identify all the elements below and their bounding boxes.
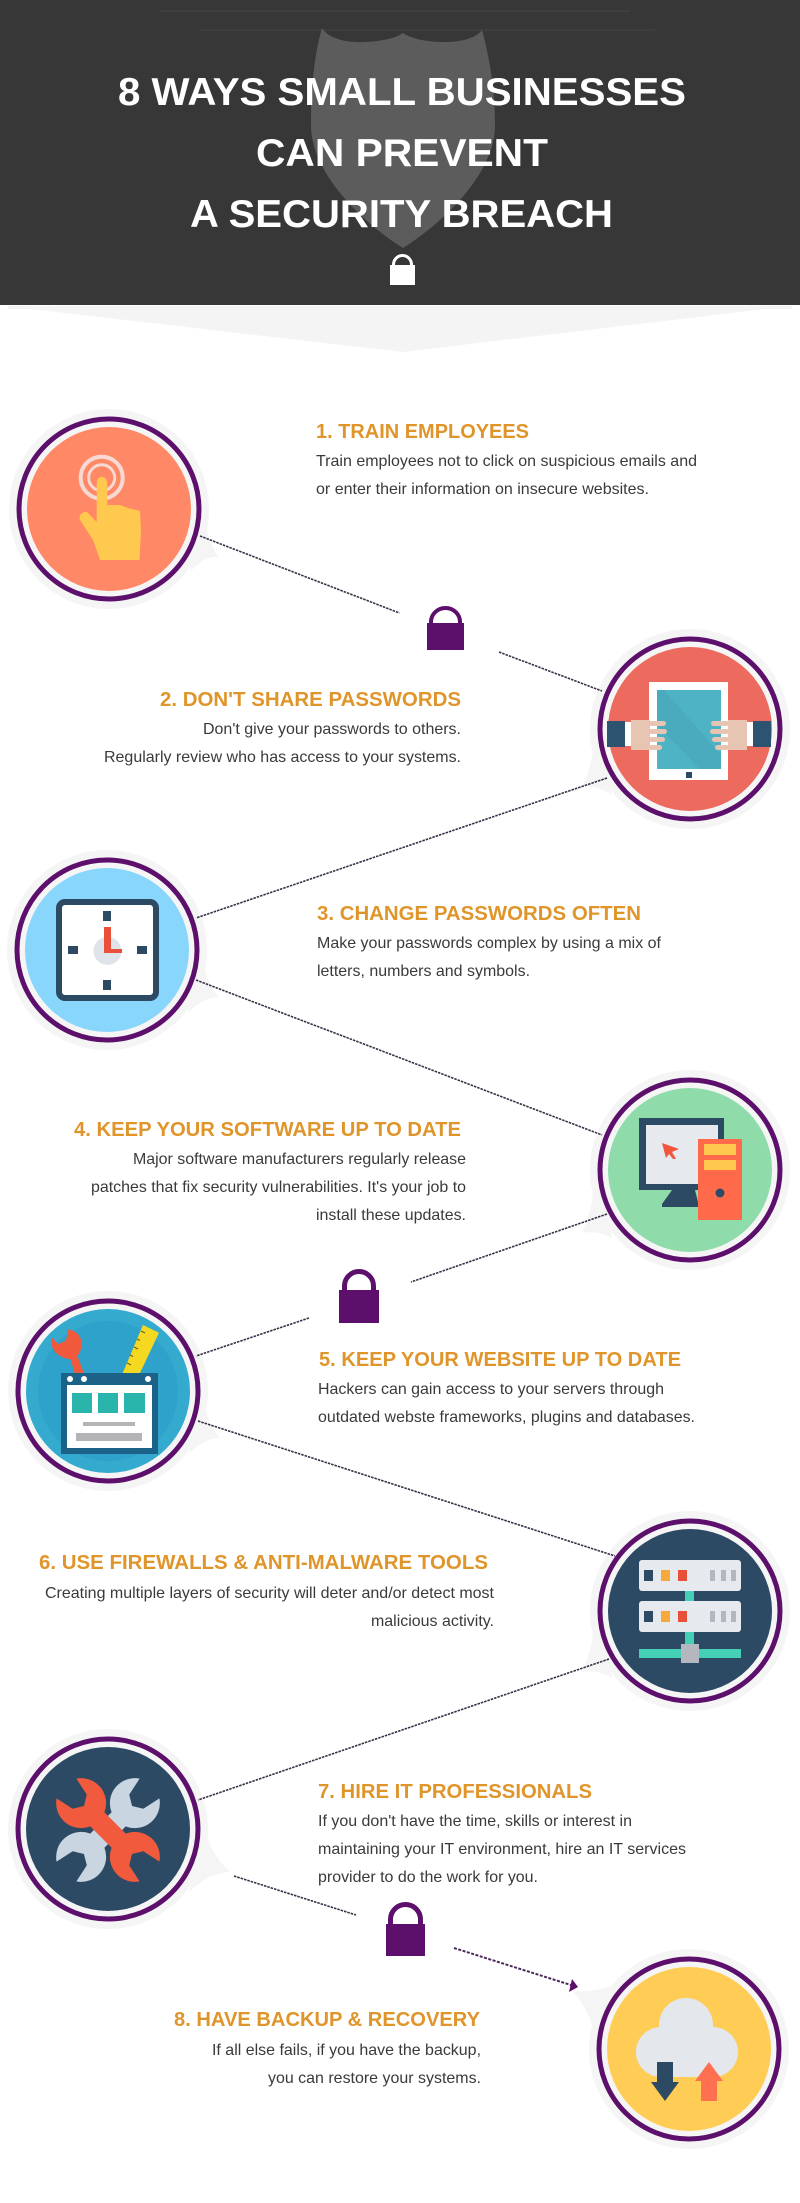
- shield icon: [311, 28, 495, 248]
- header banner: [0, 0, 800, 352]
- icon: grey wrench: [49, 1771, 167, 1889]
- text: item 3: [317, 935, 662, 980]
- text: item 4: Major software manufacturers regularly release: [133, 1151, 466, 1168]
- text: item 1: Train employees not to click on suspicious emails and: [316, 453, 697, 470]
- text: item 7: provider to do the work for you.: [318, 1869, 538, 1886]
- connector line: circle 1 to lock: [200, 536, 400, 613]
- connector line: circle 3 to circle 4: [196, 980, 602, 1135]
- icon: white padlock: [390, 256, 415, 285]
- arrow: lock to circle 8: [454, 1948, 578, 1992]
- connector line: circle 7 to lock: [234, 1876, 356, 1915]
- heading: item 5: 5. KEEP YOUR WEBSITE UP TO DATE: [319, 1349, 681, 1371]
- text: item 4: [91, 1151, 466, 1224]
- heading: item 3: 3. CHANGE PASSWORDS OFTEN: [317, 903, 641, 925]
- text: item 2: Regularly review who has access to your systems.: [104, 749, 461, 766]
- circle 8: cloud backup: [573, 1949, 789, 2149]
- icon: purple padlock 3: [386, 1905, 425, 1956]
- icon: orange wrench: [49, 1771, 167, 1889]
- text: item 5: outdated webste frameworks, plugins and databases.: [318, 1409, 695, 1426]
- text: item 4: install these updates.: [316, 1207, 466, 1224]
- text: item 1: or enter their information on insecure websites.: [316, 481, 649, 498]
- circle 5: website tools: [8, 1291, 220, 1491]
- icon: wrench: [51, 1329, 84, 1373]
- connector line: lock to circle 5: [196, 1318, 309, 1356]
- chevron below header: [8, 306, 792, 352]
- text: item 7: maintaining your IT environment, hire an IT services: [318, 1841, 686, 1858]
- heading: item 4: 4. KEEP YOUR SOFTWARE UP TO DATE: [74, 1119, 461, 1141]
- icon: purple padlock 2: [339, 1272, 379, 1323]
- heading: item 8: 8. HAVE BACKUP & RECOVERY: [174, 2009, 481, 2031]
- text: item 5: [318, 1381, 695, 1426]
- connector line: lock to circle 2: [499, 652, 602, 691]
- text: item 6: [45, 1585, 495, 1630]
- connector line: circle 5 to circle 6: [198, 1421, 615, 1556]
- heading: item 2: 2. DON'T SHARE PASSWORDS: [160, 689, 461, 711]
- title: CAN PREVENT: [256, 132, 548, 175]
- icon: cloud: [636, 1998, 738, 2077]
- heading: item 6: 6. USE FIREWALLS & ANTI-MALWARE TOOLS: [39, 1552, 488, 1574]
- icon: clock: [59, 902, 156, 998]
- icon: hand: [80, 477, 141, 560]
- icon: purple padlock 1: [427, 608, 464, 650]
- text: item 4: patches that fix security vulnerabilities. It's your job to: [91, 1179, 466, 1196]
- text: item 7: If you don't have the time, skills or interest in: [318, 1813, 632, 1830]
- circle 1: click hand: [9, 409, 219, 609]
- icon: browser window: [61, 1373, 158, 1454]
- connector line: circle 2 to circle 3: [196, 778, 607, 918]
- icon: tower: [698, 1139, 742, 1220]
- title: A SECURITY BREACH: [190, 193, 613, 236]
- title: 8 WAYS SMALL BUSINESSES: [118, 71, 686, 114]
- title: [118, 71, 686, 236]
- icon: monitor: [639, 1118, 724, 1207]
- icon: upload arrow: [695, 2062, 723, 2101]
- icon: left hand: [607, 720, 667, 750]
- heading: item 7: 7. HIRE IT PROFESSIONALS: [318, 1781, 592, 1803]
- circle 7: crossed wrenches: [8, 1729, 230, 1929]
- text: item 8: If all else fails, if you have the backup,: [212, 2042, 481, 2059]
- icon: download arrow: [651, 2062, 679, 2101]
- icon: tablet: [649, 682, 728, 780]
- text: item 6: malicious activity.: [371, 1613, 494, 1630]
- text: item 3: letters, numbers and symbols.: [317, 963, 530, 980]
- circle 2: tablet and hands: [582, 629, 790, 829]
- icon: ruler: [123, 1325, 159, 1373]
- text: item 6: Creating multiple layers of security will deter and/or detect most: [45, 1585, 495, 1602]
- text: item 2: Don't give your passwords to others.: [203, 721, 461, 738]
- circle 6: servers: [582, 1511, 790, 1711]
- text: item 8: [212, 2042, 481, 2087]
- circle 3: clock: [7, 850, 219, 1050]
- heading: item 1: 1. TRAIN EMPLOYEES: [316, 421, 529, 443]
- text: item 2: [104, 721, 461, 766]
- circle 4: computer: [582, 1070, 790, 1270]
- text: item 8: you can restore your systems.: [268, 2070, 481, 2087]
- text: item 7: [318, 1813, 686, 1886]
- text: item 3: Make your passwords complex by using a mix of: [317, 935, 662, 952]
- text: item 5: Hackers can gain access to your servers through: [318, 1381, 664, 1398]
- connector line: circle 6 to circle 7: [198, 1659, 609, 1800]
- icon: touch rings: [81, 457, 123, 499]
- connector line: circle 4 to lock: [411, 1214, 607, 1282]
- icon: servers: [639, 1560, 741, 1663]
- icon: right hand: [710, 720, 771, 750]
- text: item 1: [316, 453, 697, 498]
